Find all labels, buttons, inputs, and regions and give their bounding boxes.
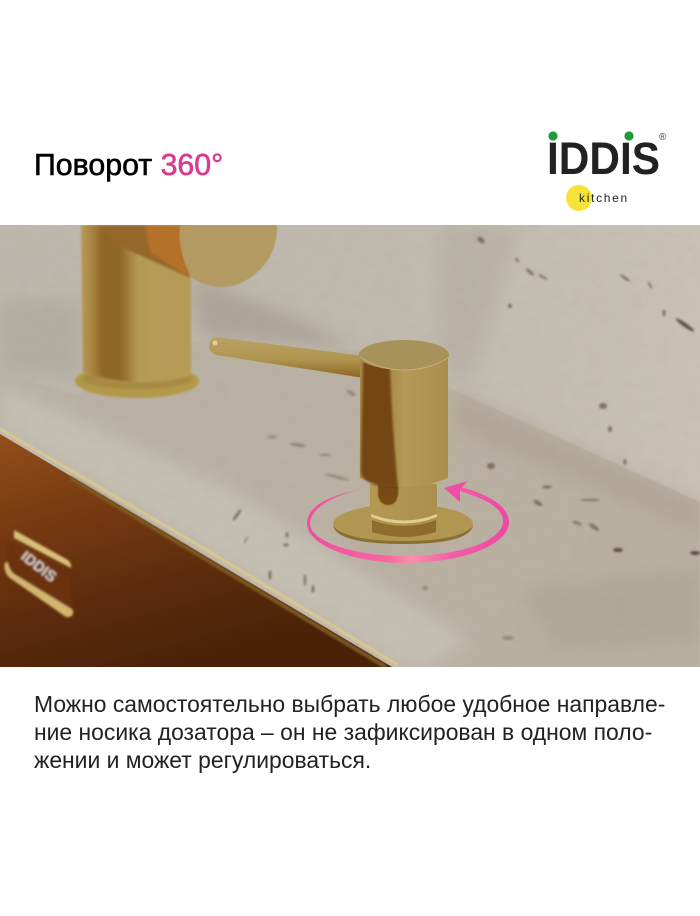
counter: lower right shade [520,570,700,650]
background: back wall [0,225,700,667]
icon: green dots [548,131,634,141]
icon: yellow circle [566,185,592,211]
body text: ние носика дозатора – он не зафиксирован в одном поло- [34,719,652,745]
wall shading [440,225,520,380]
logo: iddis kitchen [547,131,667,211]
counter: shade along seam [450,392,700,530]
sink: copper basin [0,429,398,667]
rotation arrow [307,481,509,563]
body text: жении и может регулироваться. [34,747,371,773]
dispenser neck [370,484,437,536]
faucet base [75,364,199,398]
dispenser cap [359,340,449,370]
faucet spout [97,225,190,278]
wall shadow behind dispenser [190,275,360,350]
stone texture [0,225,700,667]
registered mark: ® [659,132,667,143]
dispenser body [360,355,448,487]
logo wordmark: IDDIS [547,133,660,184]
logo subtitle: kitchen [579,191,629,205]
body text: Можно самостоятельно выбрать любое удобное направле- [34,691,665,717]
counter: surface [0,340,700,667]
title: Поворот 360° [34,149,223,182]
left wall shade [0,300,80,380]
counter: lit band near sink [0,385,470,667]
dispenser lever [209,337,364,378]
stone pits [232,236,700,640]
dispenser [209,337,473,544]
body text [34,691,665,773]
sink overflow badge [5,530,73,617]
sink overflow badge: IDDIS [18,548,60,586]
photo: gold soap dispenser on stone counter [0,225,700,667]
dispenser base plate [333,504,473,544]
sink rim [70,478,386,667]
faucet [75,225,199,398]
faucet column [81,225,191,382]
faucet handle disc [180,225,277,287]
